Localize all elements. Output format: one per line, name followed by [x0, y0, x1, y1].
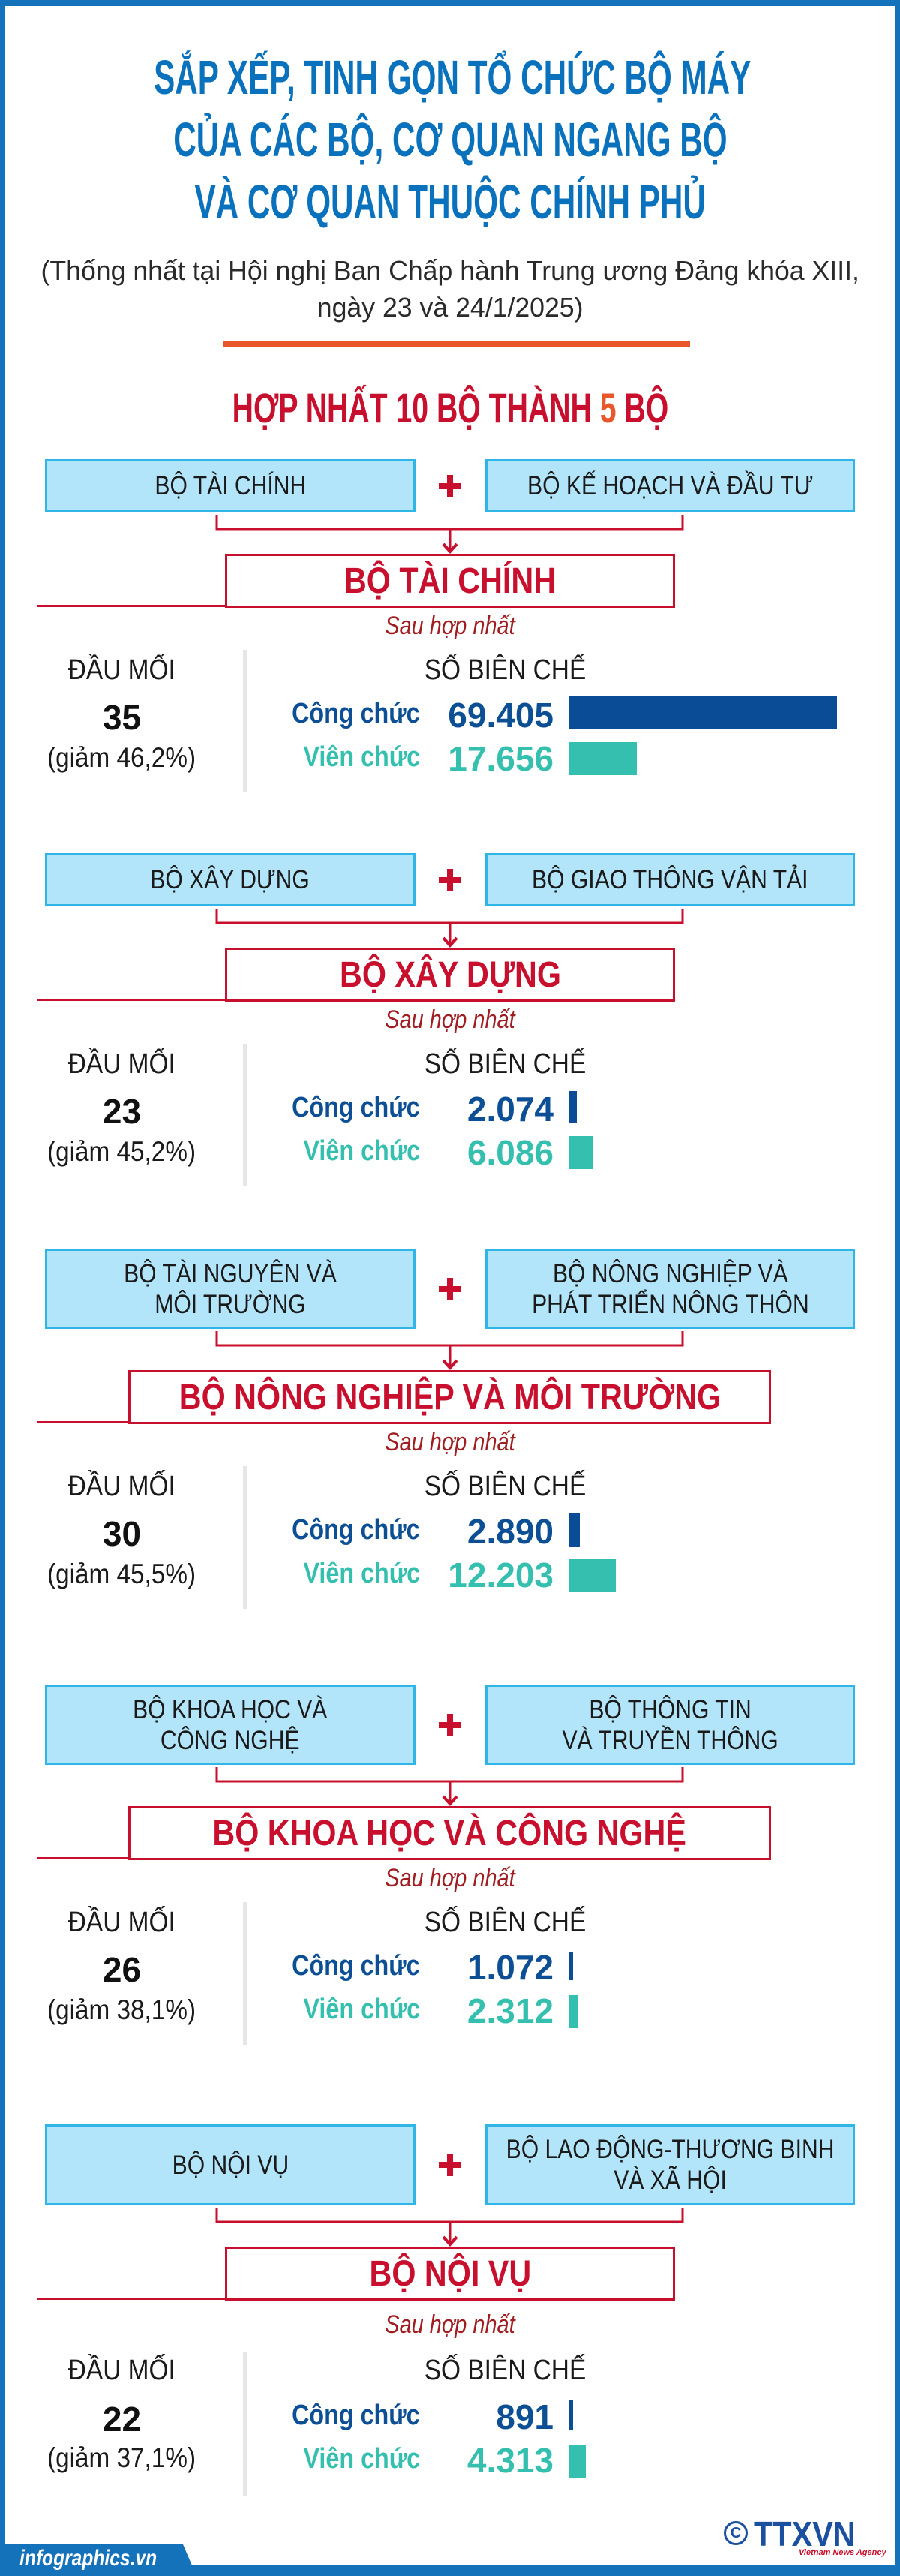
footer: infographics.vn tab: infographics.vn [20, 2546, 157, 2571]
source box left [45, 1685, 416, 1765]
stats: bien che chart: 17.656 [448, 739, 554, 778]
stats: bien che chart: 69.405 [448, 696, 554, 735]
stats: dau moi: ĐẦU MỐI [68, 1048, 176, 1080]
plus icon [439, 2154, 461, 2176]
caption: Sau hợp nhất [385, 1428, 515, 1456]
stats: dau moi [47, 1906, 196, 2025]
result box: BỘ XÂY DỰNG [340, 954, 560, 995]
source box right: BỘ KẾ HOẠCH VÀ ĐẦU TƯ [527, 471, 813, 500]
stats: bien che chart [292, 1470, 616, 1595]
source box left [45, 459, 416, 512]
stats: bien che chart: 2.074 [467, 1090, 554, 1129]
source box left: BỘ XÂY DỰNG [151, 865, 310, 894]
source box right: VÀ TRUYỀN THÔNG [562, 1726, 778, 1754]
source box right: BỘ LAO ĐỘNG-THƯƠNG BINH [506, 2135, 834, 2164]
orange divider [223, 341, 690, 347]
plus icon [439, 1278, 461, 1300]
stats: dau moi: 26 [103, 1950, 141, 1989]
caption: Sau hợp nhất [385, 2310, 515, 2339]
stats: bien che chart: 4.313 [467, 2441, 554, 2480]
stats: dau moi: (giảm 45,5%) [47, 1559, 196, 1589]
heading: merge 10 into 5: HỢP NHẤT 10 BỘ THÀNH 5 BỘ [232, 384, 668, 431]
stats: dau moi: (giảm 38,1%) [47, 1994, 196, 2025]
stats: bien che chart: Viên chức [303, 2443, 420, 2475]
section 5: Bộ Nội vụ [37, 2124, 855, 2496]
stats: dau moi: ĐẦU MỐI [68, 654, 176, 686]
caption: Sau hợp nhất [385, 1864, 515, 1892]
stats: bien che chart: Viên chức [303, 1558, 420, 1589]
result box: BỘ KHOA HỌC VÀ CÔNG NGHỆ [213, 1813, 686, 1853]
stats: bien che chart: Công chức [292, 698, 420, 729]
connector arrow [216, 1767, 684, 1806]
result box [225, 948, 675, 1002]
stats: bien che chart [292, 2354, 586, 2480]
source box left [45, 2124, 416, 2205]
result box [225, 2247, 675, 2301]
section 3: Bộ Nông nghiệp và Môi trường [37, 1249, 855, 1609]
stats: dau moi: ĐẦU MỐI [68, 1471, 176, 1502]
stats: bien che chart: SỐ BIÊN CHẾ [424, 2355, 586, 2386]
result box [128, 1806, 771, 1860]
stats: dau moi: (giảm 46,2%) [47, 742, 196, 773]
logo: TTXVN: Vietnam News Agency [799, 2548, 886, 2557]
result box: BỘ TÀI CHÍNH [344, 561, 556, 600]
source box left: CÔNG NGHỆ [160, 1726, 300, 1754]
stats: dau moi: 35 [103, 698, 141, 737]
stats: dau moi: (giảm 37,1%) [47, 2442, 196, 2473]
stats: bien che chart: Công chức [292, 2400, 420, 2431]
stats: dau moi [47, 1048, 196, 1167]
stats: bien che chart: Viên chức [303, 741, 420, 773]
underline [37, 999, 226, 1001]
stats: dau moi [47, 2354, 196, 2473]
source box left [45, 1249, 416, 1329]
underline [37, 2298, 226, 2300]
plus icon [439, 869, 461, 891]
connector arrow [216, 2208, 684, 2247]
stats: bien che chart: Công chức [292, 1950, 420, 1982]
stats: bien che chart [292, 654, 837, 778]
stats: bien che chart: SỐ BIÊN CHẾ [424, 1907, 586, 1938]
stats: dau moi: 22 [103, 2400, 141, 2439]
caption: Sau hợp nhất [385, 1005, 515, 1034]
connector arrow [216, 909, 684, 948]
stats: dau moi [47, 1470, 196, 1589]
stats: dau moi: 23 [103, 1092, 141, 1131]
section 4: Bộ Khoa học và Công nghệ [37, 1685, 855, 2045]
result box: BỘ NỘI VỤ [369, 2254, 531, 2293]
stats: dau moi: ĐẦU MỐI [68, 1907, 176, 1938]
connector arrow [216, 1331, 684, 1370]
source box right [485, 2124, 855, 2205]
underline [37, 605, 226, 607]
source box right [485, 1685, 855, 1765]
source box left: MÔI TRƯỜNG [154, 1289, 306, 1319]
subtitle: (Thống nhất tại Hội nghị Ban Chấp hành Trung ương Đảng khóa XIII, [40, 255, 860, 286]
stats: bien che chart: Viên chức [303, 1135, 420, 1167]
footer: infographics.vn tab [5, 2544, 192, 2571]
stats: bien che chart [292, 1906, 586, 2030]
source box left: BỘ NỘI VỤ [172, 2151, 289, 2179]
stats: bien che chart: 2.890 [467, 1512, 554, 1551]
underline [37, 1421, 129, 1423]
connector arrow [216, 515, 684, 554]
source box right: BỘ THÔNG TIN [589, 1694, 752, 1724]
caption: Sau hợp nhất [385, 612, 515, 640]
source box right [485, 853, 855, 906]
source box left: BỘ TÀI CHÍNH [154, 471, 306, 500]
stats: bien che chart: Công chức [292, 1092, 420, 1123]
stats: bien che chart: SỐ BIÊN CHẾ [424, 654, 586, 686]
underline [37, 1857, 129, 1859]
source box right [485, 1249, 855, 1329]
stats: dau moi: ĐẦU MỐI [68, 2355, 176, 2386]
section 2: Bộ Xây dựng [37, 853, 855, 1186]
result box [225, 554, 675, 608]
logo: TTXVN: TTXVN [754, 2514, 856, 2553]
stats: bien che chart: SỐ BIÊN CHẾ [424, 1048, 586, 1080]
plus icon [439, 475, 461, 497]
result box [128, 1370, 771, 1424]
source box right: BỘ NÔNG NGHIỆP VÀ [553, 1259, 788, 1288]
stats: bien che chart: 2.312 [467, 1991, 554, 2030]
subtitle: ngày 23 và 24/1/2025) [317, 292, 583, 323]
source box right: VÀ XÃ HỘI [614, 2166, 727, 2195]
stats: bien che chart: Viên chức [303, 1994, 420, 2025]
stats: bien che chart: 6.086 [467, 1133, 554, 1172]
section 1: Bộ Tài chính [37, 459, 855, 792]
title: VÀ CƠ QUAN THUỘC CHÍNH PHỦ [194, 175, 706, 229]
title: SẮP XẾP, TINH GỌN TỔ CHỨC BỘ MÁY [154, 50, 751, 104]
stats: bien che chart [292, 1048, 592, 1172]
source box left: BỘ TÀI NGUYÊN VÀ [124, 1259, 337, 1288]
stats: dau moi: (giảm 45,2%) [47, 1136, 196, 1167]
source box left: BỘ KHOA HỌC VÀ [133, 1694, 328, 1724]
stats: bien che chart: SỐ BIÊN CHẾ [424, 1471, 586, 1502]
stats: bien che chart: Công chức [292, 1514, 420, 1546]
logo: TTXVN: C [730, 2525, 741, 2541]
source box right: PHÁT TRIỂN NÔNG THÔN [532, 1289, 808, 1319]
source box right: BỘ GIAO THÔNG VẬN TẢI [532, 865, 808, 894]
stats: dau moi: 30 [103, 1514, 141, 1553]
source box right [485, 459, 855, 512]
result box: BỘ NÔNG NGHIỆP VÀ MÔI TRƯỜNG [178, 1378, 721, 1417]
subtitle [40, 255, 860, 323]
source box left [45, 853, 416, 906]
stats: dau moi [47, 654, 196, 773]
title: CỦA CÁC BỘ, CƠ QUAN NGANG BỘ [173, 113, 727, 167]
plus icon [439, 1714, 461, 1736]
title [154, 50, 751, 229]
logo: TTXVN [724, 2514, 886, 2557]
stats: bien che chart: 891 [496, 2397, 554, 2436]
stats: bien che chart: 12.203 [448, 1556, 554, 1595]
stats: bien che chart: 1.072 [467, 1948, 554, 1987]
